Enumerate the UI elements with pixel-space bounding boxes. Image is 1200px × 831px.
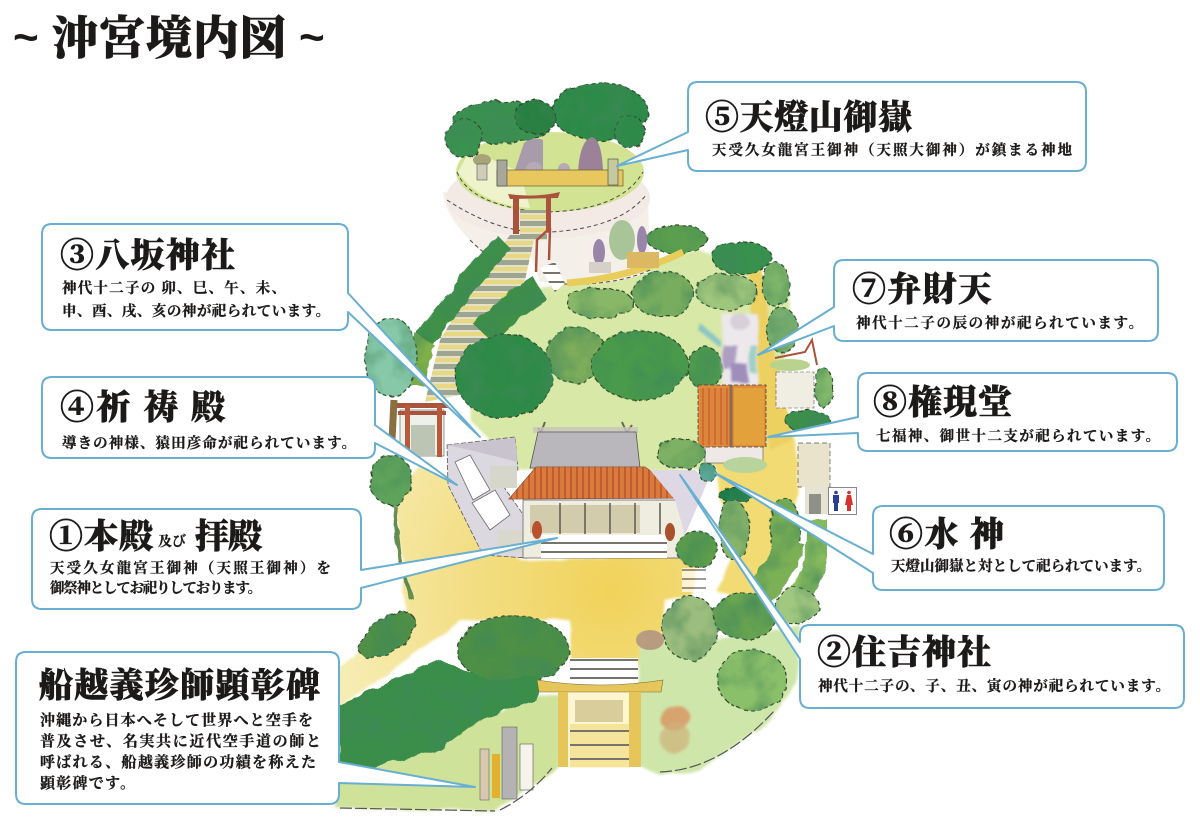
callout: 5 天燈山御嶽 xyxy=(617,82,1086,171)
main hall (honden and haiden) xyxy=(509,422,708,592)
mound: 天燈山 cylinder xyxy=(443,132,650,284)
callout: 1 本殿及び拝殿: 天受久女龍宮王御神（天照王御神）を xyxy=(50,559,331,577)
callout: 船越義珍師顕彰碑: 普及させ、名実共に近代空手道の師と xyxy=(40,732,321,750)
memorial stones xyxy=(480,727,533,800)
callout: 6 水神: ⑥水 神 xyxy=(889,516,1004,554)
icon: restroom sign xyxy=(828,488,856,514)
callout: 3 八坂神社 xyxy=(42,224,480,437)
benzaiten statue xyxy=(698,314,758,386)
lower left forest xyxy=(338,603,569,775)
callout: 8 権現堂: ⑧権現堂 xyxy=(873,384,1012,422)
callout: 1 本殿及び拝殿: 御祭神としてお祀りしております。 xyxy=(50,579,262,597)
callout: 3 八坂神社: 申、酉、戌、亥の神が祀られています。 xyxy=(62,302,330,320)
callout: 5 天燈山御嶽: ⑤天燈山御嶽 xyxy=(705,99,912,137)
callout: 6 水神: 天燈山御嶽と対として祀られています。 xyxy=(891,557,1151,575)
callout: 1 本殿及び拝殿: ①本殿 xyxy=(49,518,154,556)
callout: 2 住吉神社 xyxy=(680,475,1184,708)
callout: 6 水神 xyxy=(715,473,1164,590)
callout: 4 祈祷殿: 導きの神様、猿田彦命が祀られています。 xyxy=(62,434,356,452)
callout: 2 住吉神社: 神代十二子の、子、丑、寅の神が祀られています。 xyxy=(818,677,1170,695)
orange-roofed Gongen-do xyxy=(698,385,767,473)
ground: lawns and paths xyxy=(335,250,800,811)
summit stones, platform, lanterns xyxy=(473,137,623,186)
callout: 船越義珍師顕彰碑: 呼ばれる、船越義珍師の功績を称えた xyxy=(40,753,316,771)
mound stones and yellow path xyxy=(567,226,683,283)
callout: 5 天燈山御嶽: 天受久女龍宮王御神（天照大御神）が鎮まる神地 xyxy=(712,141,1072,159)
trees and hedges beside the hall xyxy=(657,439,819,710)
title: ~ xyxy=(299,13,325,62)
lower stairs and torii gate xyxy=(537,630,664,768)
callout: 船越義珍師顕彰碑: 沖縄から日本へそして世界へと空手を xyxy=(40,711,313,729)
left hall buildings and left torii xyxy=(392,400,527,558)
illustrated shrine grounds map xyxy=(335,83,856,811)
callout: 7 弁財天: 神代十二子の辰の神が祀られています。 xyxy=(856,314,1143,332)
callout: 船越義珍師顕彰碑: 顕彰碑です。 xyxy=(40,774,135,792)
callout: 4 祈祷殿 xyxy=(42,377,457,485)
callout: 1 本殿及び拝殿: 及び xyxy=(158,534,186,550)
callout: 7 弁財天: ⑦弁財天 xyxy=(852,271,992,309)
trees across the hillside xyxy=(365,242,833,600)
callout: 4 祈祷殿: ④祈 祷 殿 xyxy=(60,389,226,427)
lower garden details xyxy=(659,706,691,753)
callout: 1 本殿及び拝殿: 拝殿 xyxy=(195,518,263,556)
callout: 3 八坂神社: 神代十二子の 卯、巳、午、未、 xyxy=(62,279,286,297)
title: 沖宮境内図 xyxy=(52,13,286,64)
callout: 7 弁財天 xyxy=(758,260,1158,355)
right side small shrine buildings xyxy=(770,340,830,514)
callout: 3 八坂神社: ③八坂神社 xyxy=(60,237,235,275)
trees around the summit xyxy=(446,83,707,253)
upper torii and stairs xyxy=(425,192,565,402)
callout: 8 権現堂 xyxy=(768,373,1177,451)
callout: 船越義珍師顕彰碑 xyxy=(16,652,475,804)
outer ground sketch lines xyxy=(340,710,775,811)
callout: 1 本殿及び拝殿 xyxy=(32,509,557,609)
title: ~ xyxy=(13,13,39,62)
callout: 船越義珍師顕彰碑: 船越義珍師顕彰碑 xyxy=(39,667,320,705)
callout: 2 住吉神社: ②住吉神社 xyxy=(817,634,991,672)
callout: 8 権現堂: 七福神、御世十二支が祀られています。 xyxy=(876,427,1160,445)
